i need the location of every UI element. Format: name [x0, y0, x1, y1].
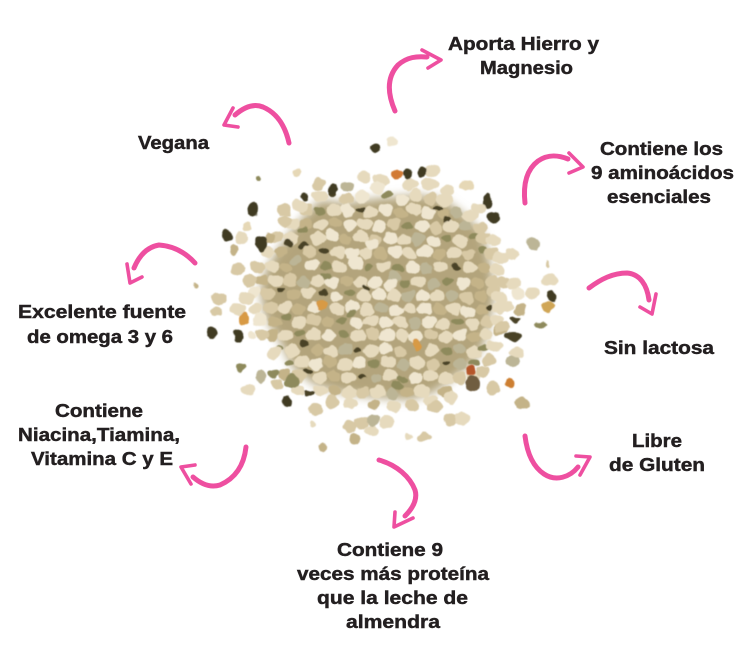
label: niacina: Niacina,Tiamina, [18, 425, 180, 445]
label: hierro: Magnesio [480, 58, 573, 78]
arrow: niacina [181, 447, 246, 486]
heap seeds [238, 189, 514, 412]
arrow: gluten [525, 436, 590, 478]
seed pile [193, 136, 558, 452]
label: niacina: Contiene [55, 401, 143, 421]
label: niacina: Vitamina C y E [31, 449, 173, 469]
label: hierro: Aporta Hierro y [448, 34, 599, 54]
arrow: proteina [379, 460, 416, 527]
arrow: hierro [389, 50, 441, 111]
label: aminoacidos [591, 139, 734, 207]
label: vegana: Vegana [138, 133, 210, 153]
stray seeds [193, 136, 558, 452]
label: niacina [18, 401, 180, 469]
label: gluten [609, 431, 705, 475]
arrow: aminoacidos [524, 153, 583, 203]
label: aminoacidos: 9 aminoácidos [591, 163, 734, 183]
label: omega: de omega 3 y 6 [27, 327, 173, 347]
arrow: omega [127, 245, 195, 283]
label: proteina: almendra [346, 612, 441, 632]
label: gluten: de Gluten [609, 455, 705, 475]
label: proteina: veces más proteína [297, 564, 490, 584]
label: proteina [297, 540, 490, 632]
label: proteina: Contiene 9 [337, 540, 443, 560]
pile base [260, 195, 495, 400]
label: proteina: que la leche de [317, 588, 468, 608]
label: omega [18, 302, 186, 347]
arrow: lactosa [589, 273, 656, 314]
label: lactosa: Sin lactosa [604, 338, 715, 358]
label: gluten: Libre [632, 431, 682, 451]
arrow: vegana [224, 106, 289, 143]
label: aminoacidos: esenciales [607, 187, 711, 207]
label: hierro [448, 34, 599, 78]
label: aminoacidos: Contiene los [600, 139, 723, 159]
label: omega: Excelente fuente [18, 302, 186, 322]
